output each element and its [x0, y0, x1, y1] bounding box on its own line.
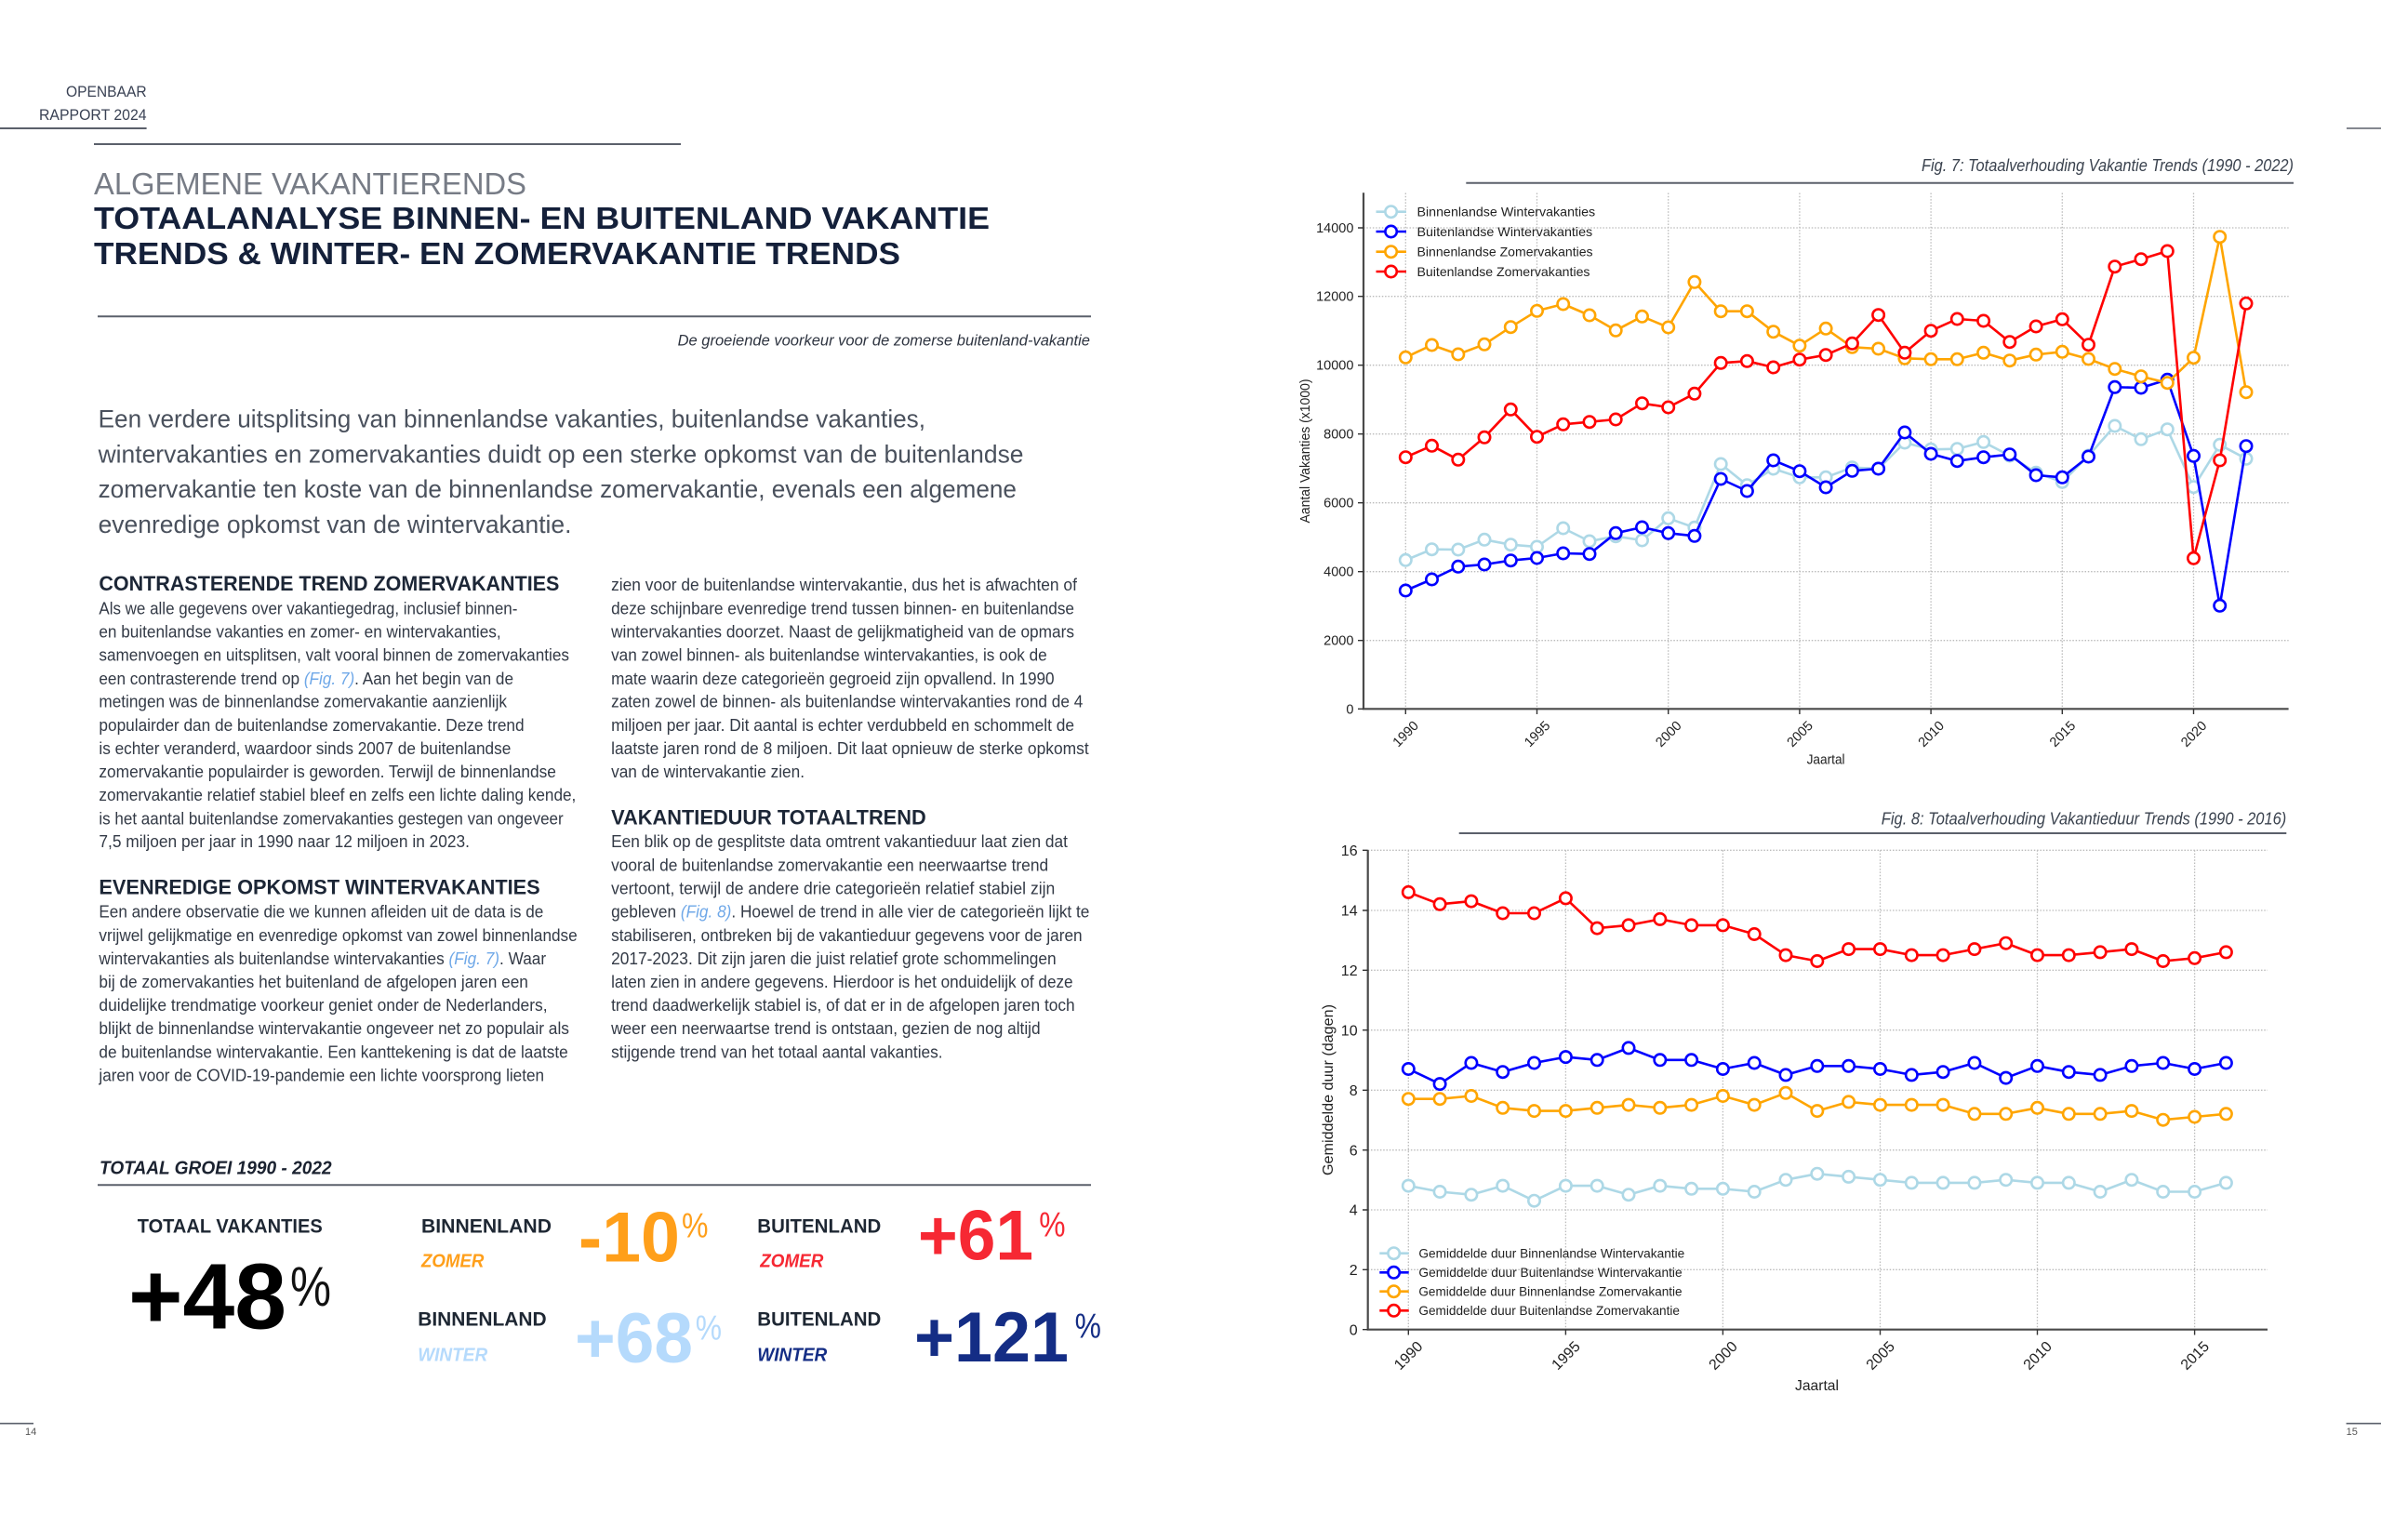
text section: contrasterende trend zomervakanties	[99, 572, 576, 851]
x axis year labels: 2010	[2021, 1339, 2055, 1374]
text section: contrasterende trend zomervakanties: samenvoegen en uitsplitsen, valt vooral binnen de zomervakanties	[99, 646, 569, 665]
page number left: 14	[25, 1427, 36, 1438]
page header: document label: RAPPORT 2024	[39, 107, 147, 124]
stat: binnenland zomer -10%	[420, 1199, 709, 1278]
y axis tick labels: 14000	[1316, 221, 1353, 236]
stat: binnenland winter +68%: WINTER	[418, 1344, 487, 1365]
stat: buitenland zomer +61%: %	[1039, 1205, 1066, 1243]
page number right	[2347, 1424, 2381, 1438]
text section: vakantieduur totaaltrend: laten zien in andere gegevens. Hierdoor is het onduidelijk of deze	[611, 973, 1073, 991]
y axis tick labels: 2	[1350, 1263, 1358, 1279]
y axis tick labels	[1316, 221, 1353, 717]
text section: evenredige opkomst wintervakanties: EVENREDIGE OPKOMST WINTERVAKANTIES	[99, 876, 540, 899]
stat: totaal vakanties +48%	[128, 1215, 331, 1348]
text section: continued winter paragraph	[610, 576, 1089, 781]
right page top marker	[2347, 127, 2381, 129]
statistics heading: TOTAAL GROEI 1990 - 2022	[100, 1158, 332, 1179]
title block: TRENDS & WINTER- EN ZOMERVAKANTIE TRENDS	[94, 236, 900, 271]
stat: buitenland zomer +61%	[757, 1196, 1066, 1275]
text section: evenredige opkomst wintervakanties: wintervakanties als buitenlandse wintervakanties (Fig. 7). Waar	[98, 949, 546, 968]
stat: binnenland zomer -10%: %	[682, 1207, 709, 1245]
title block	[94, 144, 990, 271]
stat: totaal vakanties +48%: TOTAAL VAKANTIES	[138, 1215, 323, 1237]
legend figure 8: Gemiddelde duur Binnenlandse Zomervakantie	[1418, 1283, 1683, 1298]
text section: evenredige opkomst wintervakanties: jaren voor de COVID-19-pandemie een lichte voorsprong lieten	[98, 1067, 544, 1085]
text section: vakantieduur totaaltrend: stijgende trend van het totaal aantal vakanties.	[611, 1042, 943, 1061]
x axis title: Jaartal	[1807, 753, 1845, 768]
text section: vakantieduur totaaltrend: VAKANTIEDUUR TOTAALTREND	[611, 805, 926, 829]
intro paragraph: evenredige opkomst van de wintervakantie.	[99, 511, 571, 538]
intro paragraph: wintervakanties en zomervakanties duidt op een sterke opkomst van de buitenlandse	[98, 440, 1024, 468]
text section: continued winter paragraph: van de wintervakantie zien.	[611, 763, 805, 781]
stat: binnenland zomer -10%: -10	[579, 1199, 680, 1278]
text section: contrasterende trend zomervakanties: en buitenlandse vakanties en zomer- en wintervakanties,	[99, 623, 501, 642]
text section: contrasterende trend zomervakanties: is het aantal buitenlandse zomervakanties gestegen van ongeveer	[99, 809, 564, 828]
y axis tick labels: 6	[1350, 1143, 1358, 1159]
text section: contrasterende trend zomervakanties: zomervakantie relatief stabiel bleef en zelfs een lichte daling kende,	[99, 786, 576, 804]
text section: continued winter paragraph: zaten zowel de binnen- als buitenlandse wintervakanties rond de 4	[611, 693, 1083, 711]
text section: vakantieduur totaaltrend: weer een neerwaartse trend is ontstaan, gezien de nog altijd	[610, 1019, 1041, 1038]
x axis year labels	[1390, 719, 2210, 750]
x axis year labels: 1990	[1391, 1339, 1426, 1374]
stat: totaal vakanties +48%: %	[290, 1255, 331, 1318]
page header: document label: OPENBAAR	[66, 84, 147, 100]
text section: contrasterende trend zomervakanties: populairder dan de buitenlandse zomervakantie. Deze trend	[99, 716, 525, 735]
text section: contrasterende trend zomervakanties: is echter veranderd, waardoor sinds 2007 de buitenlandse	[99, 739, 511, 758]
series: binnenlandse zomervakanties	[1405, 237, 2246, 392]
x axis year labels: 1995	[1550, 1339, 1584, 1374]
y axis tick labels	[1341, 843, 1358, 1338]
stat: buitenland zomer +61%: ZOMER	[759, 1251, 823, 1272]
page number right: 15	[2347, 1427, 2358, 1438]
y axis tick labels: 12000	[1316, 290, 1353, 305]
x axis year labels: 2005	[1785, 719, 1816, 750]
text section: evenredige opkomst wintervakanties: blijkt de binnenlandse wintervakantie ongeveer net zo populair als	[99, 1019, 569, 1038]
subtitle: De groeiende voorkeur voor de zomerse buitenland-vakantie	[678, 333, 1090, 350]
series: binnenlandse wintervakanties	[1405, 426, 2246, 560]
page number left	[0, 1424, 36, 1438]
series: gemiddelde duur binnenlandse wintervakantie	[1408, 1174, 2226, 1201]
legend figure 7: Binnenlandse Zomervakanties	[1417, 244, 1593, 259]
stat: binnenland winter +68%: +68	[575, 1299, 693, 1378]
line chart: figure 7	[1298, 192, 2289, 768]
legend figure 7: Buitenlandse Zomervakanties	[1417, 264, 1590, 279]
text section: contrasterende trend zomervakanties: CONTRASTERENDE TREND ZOMERVAKANTIES	[99, 572, 559, 595]
text section: contrasterende trend zomervakanties: Als we alle gegevens over vakantiegedrag, inclusief binnen-	[99, 599, 517, 617]
text section: contrasterende trend zomervakanties: een contrasterende trend op (Fig. 7). Aan het begin van de	[99, 670, 513, 688]
y axis tick labels: 0	[1350, 1322, 1358, 1338]
y axis tick labels: 16	[1341, 843, 1358, 859]
y axis tick labels: 2000	[1324, 634, 1353, 649]
legend figure 8: Gemiddelde duur Binnenlandse Wintervakantie	[1418, 1246, 1685, 1261]
x axis year labels: 1990	[1390, 719, 1422, 750]
x axis year labels: 2015	[2047, 719, 2079, 750]
legend figure 7: Buitenlandse Wintervakanties	[1417, 224, 1592, 239]
text section: continued winter paragraph: deze schijnbare evenredige trend tussen binnen- en buitenlandse	[611, 599, 1074, 617]
x axis year labels: 2000	[1707, 1339, 1741, 1374]
text section: continued winter paragraph: mate waarin deze categorieën gegroeid zijn opvallend. In 1990	[611, 670, 1055, 688]
intro paragraph: Een verdere uitsplitsing van binnenlandse vakanties, buitenlandse vakanties,	[99, 405, 925, 433]
x axis title: Jaartal	[1795, 1378, 1839, 1394]
x axis year labels	[1391, 1339, 2213, 1374]
title block: TOTAALANALYSE BINNEN- EN BUITENLAND VAKANTIE	[94, 201, 990, 235]
x axis year labels: 2020	[2178, 719, 2210, 750]
stat: binnenland zomer -10%: ZOMER	[420, 1251, 485, 1272]
stat: binnenland winter +68%: BINNENLAND	[418, 1308, 547, 1330]
stat: binnenland zomer -10%: BINNENLAND	[421, 1215, 552, 1237]
legend figure 7	[1377, 205, 1595, 279]
line chart: figure 8	[1321, 843, 2268, 1394]
y axis tick labels: 6000	[1324, 497, 1353, 511]
legend figure 7: Binnenlandse Wintervakanties	[1417, 205, 1595, 219]
text section: vakantieduur totaaltrend: vooral de buitenlandse zomervakantie een neerwaartse trend	[611, 856, 1048, 874]
legend figure 8: Gemiddelde duur Buitenlandse Wintervakantie	[1418, 1265, 1683, 1280]
y axis tick labels: 12	[1341, 963, 1358, 979]
x axis year labels: 2005	[1864, 1339, 1898, 1374]
stat: binnenland winter +68%	[418, 1299, 722, 1378]
text section: vakantieduur totaaltrend: vertoont, terwijl de andere drie categorieën relatief stabiel zijn	[611, 880, 1055, 898]
text section: vakantieduur totaaltrend: stabiliseren, ontbreken bij de vakantieduur gegevens voor de jaren	[611, 926, 1083, 945]
stat: buitenland zomer +61%: +61	[918, 1196, 1033, 1275]
text section: evenredige opkomst wintervakanties	[98, 876, 578, 1085]
text section: vakantieduur totaaltrend: 2017-2023. Dit zijn jaren die juist relatief grote schommelingen	[611, 949, 1057, 968]
x axis year labels: 1995	[1522, 719, 1553, 750]
title block: ALGEMENE VAKANTIERENDS	[94, 166, 526, 201]
page header: document label	[0, 84, 147, 128]
y axis tick labels: 4	[1350, 1203, 1358, 1219]
text section: vakantieduur totaaltrend	[610, 805, 1089, 1061]
series: buitenlandse wintervakanties	[1405, 379, 2246, 605]
text section: continued winter paragraph: miljoen per jaar. Dit aantal is echter verdubbeld en schommelt de	[611, 716, 1074, 735]
stat: buitenland winter +121%: WINTER	[757, 1344, 827, 1365]
stat: buitenland winter +121%: BUITENLAND	[757, 1308, 881, 1330]
stat: buitenland winter +121%	[757, 1298, 1101, 1377]
stat: totaal vakanties +48%: +48	[128, 1244, 286, 1348]
stat: buitenland zomer +61%: BUITENLAND	[757, 1215, 881, 1237]
y axis tick labels: 4000	[1324, 565, 1353, 580]
y axis tick labels: 14	[1341, 904, 1358, 920]
text section: vakantieduur totaaltrend: gebleven (Fig. 8). Hoewel de trend in alle vier de categorieën lijkt te	[611, 902, 1089, 921]
series: gemiddelde duur binnenlandse zomervakantie	[1408, 1093, 2226, 1120]
intro paragraph	[98, 405, 1024, 538]
text section: continued winter paragraph: wintervakanties doorzet. Naast de gelijkmatigheid van de opmars	[610, 623, 1074, 642]
series: buitenlandse zomervakanties	[1405, 251, 2246, 558]
text section: continued winter paragraph: zien voor de buitenlandse wintervakantie, dus het is afwachten of	[611, 576, 1078, 594]
text section: evenredige opkomst wintervakanties: vrijwel gelijkmatige en evenredige opkomst van zowel binnenlandse	[99, 926, 578, 945]
stat: buitenland winter +121%: %	[1075, 1307, 1101, 1345]
panel: totaal groei statistics	[98, 1158, 1101, 1378]
stat: buitenland winter +121%: +121	[914, 1298, 1069, 1377]
y axis title: Gemiddelde duur (dagen)	[1321, 1004, 1337, 1175]
text section: contrasterende trend zomervakanties: zomervakantie populairder is geworden. Terwijl de binnenlandse	[99, 763, 556, 781]
intro paragraph: zomervakantie ten koste van de binnenlandse zomervakantie, evenals een algemene	[99, 475, 1017, 503]
text section: evenredige opkomst wintervakanties: Een andere observatie die we kunnen afleiden uit de data is de	[99, 902, 543, 921]
y axis tick labels: 8000	[1324, 428, 1353, 443]
stat: binnenland winter +68%: %	[696, 1309, 722, 1348]
text section: evenredige opkomst wintervakanties: de buitenlandse wintervakantie. Een kanttekening is dat de laatste	[99, 1042, 568, 1061]
text section: evenredige opkomst wintervakanties: bij de zomervakanties het buitenland de afgelopen jaren een	[99, 973, 528, 991]
figure 7 caption: Fig. 7: Totaalverhouding Vakantie Trends (1990 - 2022)	[1922, 155, 2294, 175]
x axis year labels: 2015	[2178, 1339, 2213, 1374]
legend figure 8: Gemiddelde duur Buitenlandse Zomervakantie	[1418, 1303, 1680, 1318]
text section: continued winter paragraph: laatste jaren rond de 8 miljoen. Dit laat opnieuw de sterke opkomst	[611, 739, 1089, 758]
text section: vakantieduur totaaltrend: trend daadwerkelijk stabiel is, of dat er in de afgelopen jaren toch	[611, 996, 1075, 1015]
legend figure 8	[1379, 1246, 1685, 1318]
text section: contrasterende trend zomervakanties: metingen was de binnenlandse zomervakantie aanzienlijk	[99, 693, 508, 711]
text section: contrasterende trend zomervakanties: 7,5 miljoen per jaar in 1990 naar 12 miljoen in 2023.	[99, 832, 470, 851]
figure 8 caption: Fig. 8: Totaalverhouding Vakantieduur Trends (1990 - 2016)	[1882, 809, 2286, 829]
x axis year labels: 2010	[1916, 719, 1948, 750]
y axis tick labels: 8	[1350, 1083, 1358, 1099]
y axis title: Aantal Vakanties (x1000)	[1298, 379, 1313, 523]
x axis year labels: 2000	[1653, 719, 1685, 750]
series: gemiddelde duur buitenlandse zomervakantie	[1408, 892, 2226, 962]
text section: vakantieduur totaaltrend: Een blik op de gesplitste data omtrent vakantieduur laat zien dat	[611, 832, 1068, 851]
text section: evenredige opkomst wintervakanties: duidelijke trendmatige voorkeur geniet onder de Nederlanders,	[99, 996, 548, 1015]
y axis tick labels: 10	[1341, 1023, 1358, 1039]
text section: continued winter paragraph: van zowel binnen- als buitenlandse wintervakanties, is ook de	[611, 646, 1047, 665]
y axis tick labels: 0	[1346, 702, 1353, 717]
series: gemiddelde duur buitenlandse wintervakantie	[1408, 1048, 2226, 1084]
y axis tick labels: 10000	[1316, 359, 1353, 374]
